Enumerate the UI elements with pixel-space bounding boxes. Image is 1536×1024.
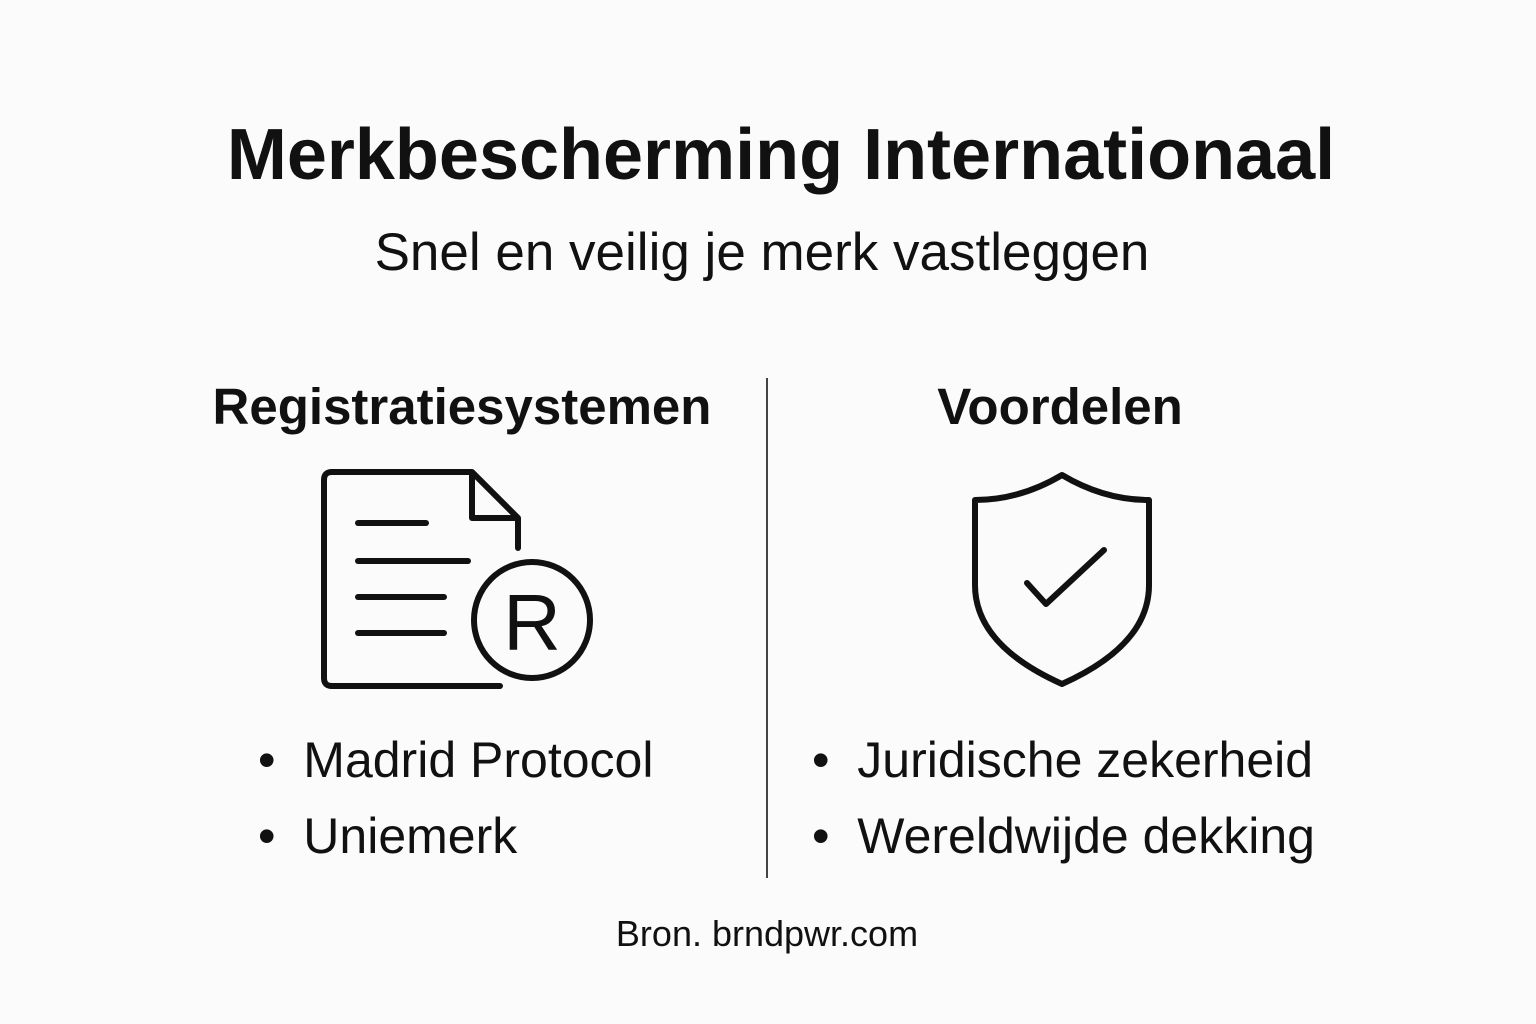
heading: Voordelen: Voordelen	[937, 378, 1183, 435]
bullet list: benefits: • Juridische zekerheid	[812, 732, 1313, 788]
title: Merkbescherming Internationaal	[227, 115, 1335, 195]
footer source: Bron. brndpwr.com	[616, 913, 918, 954]
heading: Registratiesystemen: Registratiesystemen	[213, 378, 711, 435]
divider	[766, 378, 768, 878]
subtitle: Snel en veilig je merk vastleggen	[375, 223, 1149, 282]
icon: shield with check	[972, 472, 1152, 687]
bullet list: benefits	[812, 732, 1315, 864]
bullet list: systems: • Uniemerk	[258, 808, 517, 864]
icon: document with registered mark: R	[503, 578, 561, 667]
icon: document with registered mark	[321, 469, 593, 689]
bullet list: systems: • Madrid Protocol	[258, 732, 653, 788]
bullet list: benefits: • Wereldwijde dekking	[812, 808, 1315, 864]
bullet list: systems	[258, 732, 653, 864]
